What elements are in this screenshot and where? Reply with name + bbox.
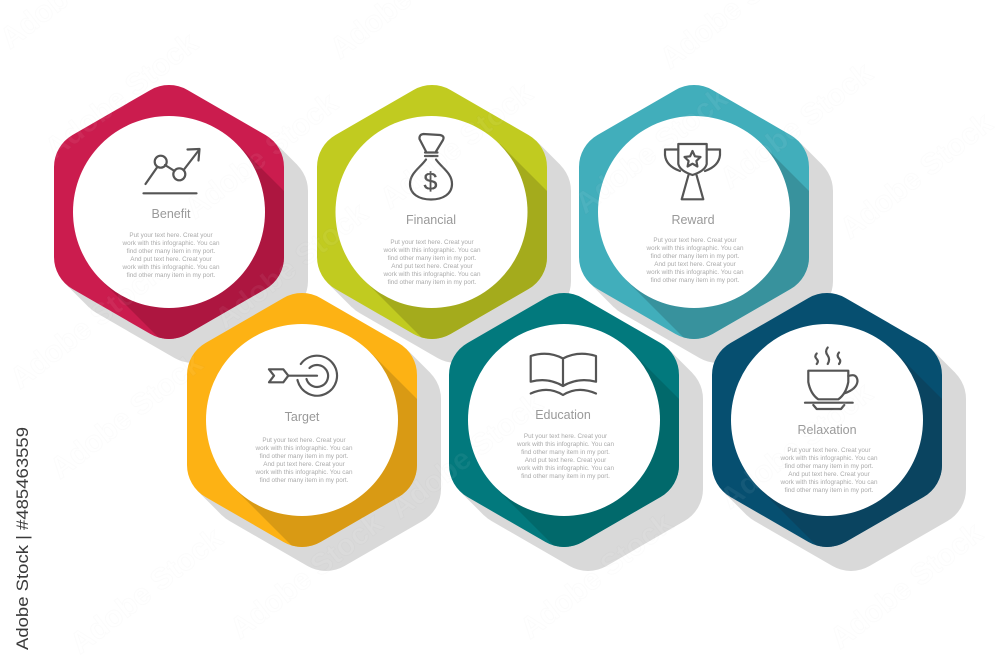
text block: Financial: find other many item in my port. (388, 279, 477, 286)
text block: Financial: find other many item in my port. (388, 255, 477, 262)
watermark overlay: Adobe Stock (834, 106, 999, 246)
panel: Relaxation (712, 293, 942, 547)
text block: Relaxation: work with this infographic. You can (780, 479, 878, 486)
text block: Reward: find other many item in my port. (651, 277, 740, 284)
icon: hot cup on saucer (805, 348, 858, 409)
text block: Relaxation: find other many item in my port. (785, 487, 874, 494)
text block: Benefit: find other many item in my port. (127, 248, 216, 255)
watermark overlay: Adobe Stock (514, 506, 679, 646)
panel: Reward (579, 85, 809, 339)
text block: Benefit: And put text here. Creat your (130, 256, 212, 263)
text block: Education: work with this infographic. You can (516, 441, 614, 448)
panel: Financial (317, 85, 547, 339)
text block: Reward: work with this infographic. You can (646, 269, 744, 276)
text block: Education: Put your text here. Creat your (524, 433, 607, 440)
watermark overlay: Adobe Stock (374, 76, 539, 216)
text block: Education: find other many item in my port. (521, 449, 610, 456)
icon: open book (531, 354, 596, 395)
icon: trophy (665, 144, 720, 199)
text block: Target: find other many item in my port. (260, 477, 349, 484)
watermark overlay: Adobe Stock (209, 196, 374, 336)
text block: Target: work with this infographic. You can (255, 469, 353, 476)
heading: Benefit: Benefit (152, 207, 191, 221)
text block: Financial: Put your text here. Creat your (390, 239, 474, 246)
text block: Relaxation: find other many item in my port. (785, 463, 874, 470)
text block: Financial: work with this infographic. You can (383, 247, 481, 254)
text block: Reward: And put text here. Creat your (654, 261, 736, 268)
text block: Target: work with this infographic. You can (255, 445, 353, 452)
text block: Relaxation: And put text here. Creat your (788, 471, 870, 478)
text block: Relaxation: work with this infographic. You can (780, 455, 878, 462)
heading: Relaxation: Relaxation (797, 423, 857, 437)
panel: Education (449, 293, 679, 547)
text block: Reward: Put your text here. Creat your (653, 237, 737, 244)
heading: Target: Target (285, 410, 320, 424)
watermark overlay: Adobe Stock (4, 256, 169, 396)
text block: Benefit: work with this infographic. You can (122, 240, 220, 247)
text block: Education: work with this infographic. You can (516, 465, 614, 472)
text block: Reward: work with this infographic. You can (646, 245, 744, 252)
text block: Target: find other many item in my port. (260, 453, 349, 460)
long shadows behind hexagons (65, 109, 966, 571)
watermark overlay: Adobe Stock (44, 346, 209, 486)
watermark overlay: Adobe Stock (39, 26, 204, 166)
text block: Target: And put text here. Creat your (263, 461, 345, 468)
text block: Financial: And put text here. Creat your (391, 263, 473, 270)
heading: Education: Education (535, 408, 591, 422)
panel: Benefit (54, 85, 284, 339)
text block: Benefit: Put your text here. Creat your (129, 232, 213, 239)
watermark overlay: Adobe Stock (824, 516, 989, 656)
icon: target with arrow (269, 356, 337, 396)
watermark overlay: Adobe Stock (714, 376, 879, 516)
watermark overlay: Adobe Stock (224, 506, 389, 646)
text block: Relaxation: Put your text here. Creat your (787, 447, 871, 454)
text block: Benefit: find other many item in my port. (127, 272, 216, 279)
watermark overlay: Adobe Stock (64, 521, 229, 661)
text block: Education: And put text here. Creat your (525, 457, 606, 464)
icon: dollar sign: $ (424, 168, 438, 196)
watermark overlay: Adobe Stock (714, 56, 879, 196)
icon: money bag (410, 134, 452, 200)
watermark overlay: Adobe Stock (179, 86, 344, 226)
panel: Target (187, 293, 417, 547)
watermark overlay: Adobe Stock (569, 81, 734, 221)
text block: Education: find other many item in my port. (521, 473, 610, 480)
heading: Reward: Reward (671, 213, 715, 227)
text block: Benefit: work with this infographic. You can (122, 264, 220, 271)
text block: Reward: find other many item in my port. (651, 253, 740, 260)
watermark overlay: Adobe Stock (384, 386, 549, 526)
text block: Target: Put your text here. Creat your (262, 437, 346, 444)
heading: Financial: Financial (406, 213, 456, 227)
text block: Financial: work with this infographic. You can (383, 271, 481, 278)
icon: growth chart (144, 149, 200, 193)
stock credit: Adobe Stock | #485463559 (13, 427, 32, 650)
